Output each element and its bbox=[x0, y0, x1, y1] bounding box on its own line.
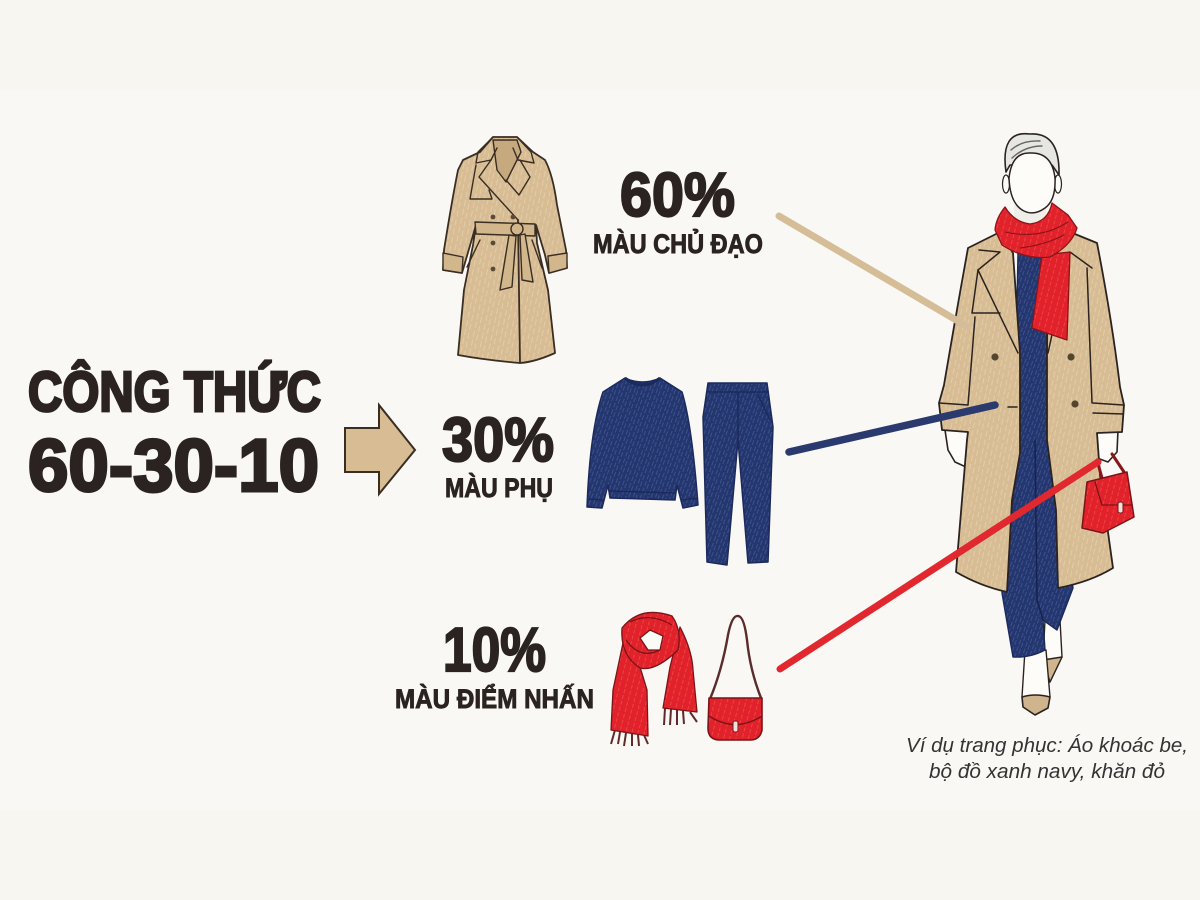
figure scarf bbox=[995, 203, 1077, 340]
connector line: navy 30% bbox=[789, 405, 995, 452]
figure handbag bbox=[1082, 454, 1134, 533]
figure hands bbox=[945, 430, 1118, 467]
label: 10% bbox=[395, 616, 594, 714]
label: 60%: 60% bbox=[620, 161, 735, 230]
icon: red shoulder bag bbox=[708, 616, 762, 740]
label: 30% bbox=[442, 406, 554, 503]
label: 60%: MÀU CHỦ ĐẠO bbox=[593, 227, 763, 259]
caption: bộ đồ xanh navy, khăn đỏ bbox=[929, 761, 1165, 783]
title: CÔNG THỨC bbox=[28, 359, 321, 424]
figure head bbox=[1002, 134, 1062, 225]
figure trench coat bbox=[939, 232, 1124, 592]
icon: red scarf bbox=[611, 612, 697, 746]
icon: navy trousers bbox=[703, 383, 773, 565]
title bbox=[28, 359, 321, 507]
figure trousers and feet bbox=[1002, 253, 1073, 715]
figure: model in outfit bbox=[939, 134, 1134, 715]
arrow bbox=[345, 405, 415, 494]
caption bbox=[906, 734, 1188, 783]
caption: Ví dụ trang phục: Áo khoác be, bbox=[906, 734, 1188, 757]
connector line: beige 60% bbox=[779, 216, 968, 327]
label: 10%: 10% bbox=[443, 616, 546, 685]
icon: navy sweater bbox=[587, 378, 698, 508]
label: 60% bbox=[593, 161, 763, 259]
label: 10%: MÀU ĐIỂM NHẤN bbox=[395, 683, 594, 714]
connector line: red 10% bbox=[780, 462, 1098, 669]
label: 30%: 30% bbox=[442, 406, 554, 475]
icon: beige trench coat bbox=[443, 137, 567, 363]
title: 60-30-10 bbox=[28, 424, 319, 507]
label: 30%: MÀU PHỤ bbox=[445, 472, 553, 503]
